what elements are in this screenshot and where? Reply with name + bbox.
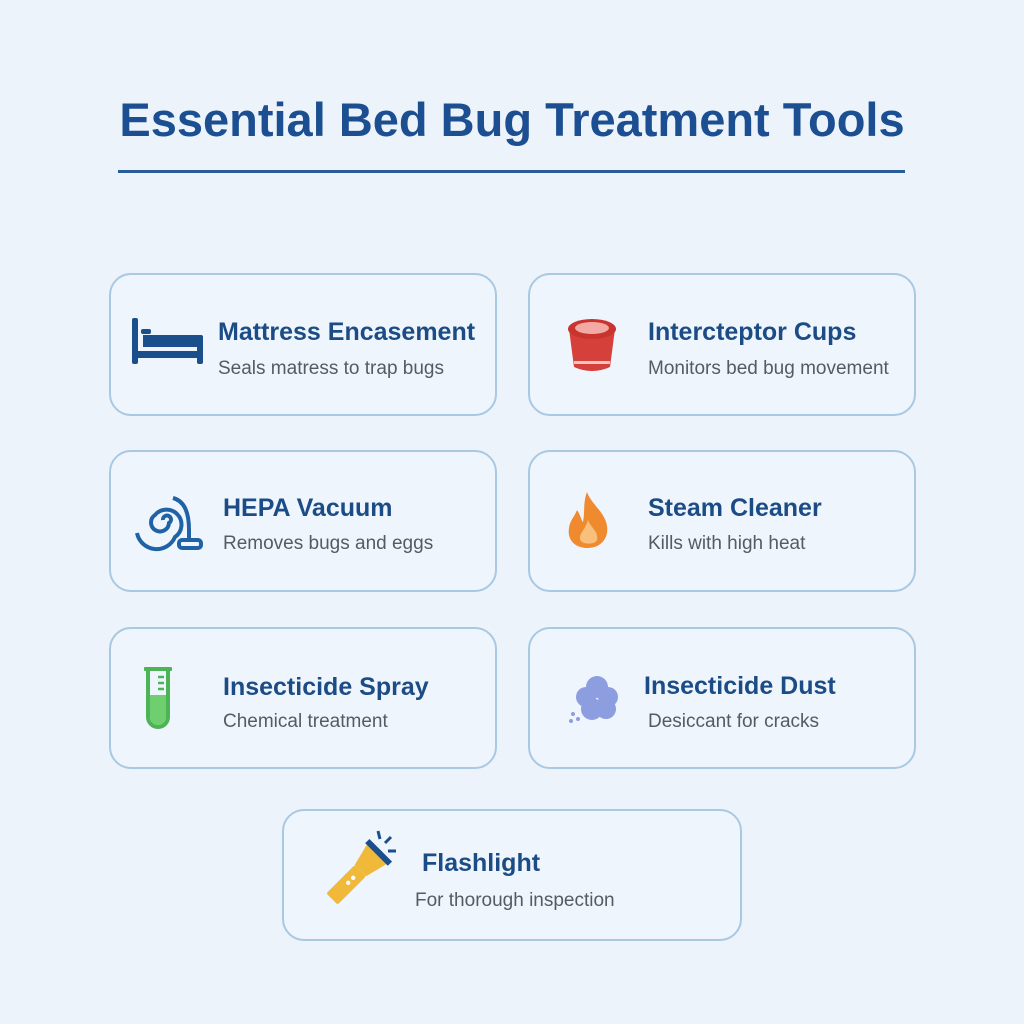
- panel: HEPA vacuum: HEPA Vacuum: [223, 494, 392, 522]
- panel: interceptor cups: Intercteptor Cups: [648, 318, 856, 346]
- title: Essential Bed Bug Treatment Tools: [119, 93, 905, 146]
- panel: flashlight: [282, 809, 742, 941]
- panel: steam cleaner: Kills with high heat: [648, 533, 805, 554]
- icon: flame: [568, 492, 608, 548]
- panel: HEPA vacuum: Removes bugs and eggs: [223, 533, 433, 554]
- panel: insecticide spray: Insecticide Spray: [223, 673, 429, 701]
- panel: HEPA vacuum: [109, 450, 497, 592]
- panel: insecticide spray: [109, 627, 497, 769]
- panel: mattress encasement: Mattress Encasement: [218, 318, 475, 346]
- icon: vacuum: [135, 496, 203, 552]
- panel: interceptor cups: [528, 273, 916, 416]
- panel: steam cleaner: Steam Cleaner: [648, 494, 822, 522]
- panel: insecticide dust: Desiccant for cracks: [648, 711, 819, 732]
- panel: mattress encasement: [109, 273, 497, 416]
- panel: insecticide dust: [528, 627, 916, 769]
- icon: cup: [568, 319, 616, 371]
- panel: flashlight: Flashlight: [422, 849, 540, 877]
- panel: insecticide spray: Chemical treatment: [223, 711, 388, 732]
- icon: bed: [132, 318, 203, 364]
- panel: insecticide dust: Insecticide Dust: [644, 672, 836, 700]
- panel: interceptor cups: Monitors bed bug movement: [648, 358, 889, 379]
- panel: mattress encasement: Seals matress to trap bugs: [218, 358, 444, 379]
- panel: steam cleaner: [528, 450, 916, 592]
- icon: flashlight: [327, 830, 396, 904]
- icon: dust cloud: [569, 676, 618, 723]
- panel: flashlight: For thorough inspection: [415, 890, 615, 911]
- icon: test tube: [144, 667, 172, 729]
